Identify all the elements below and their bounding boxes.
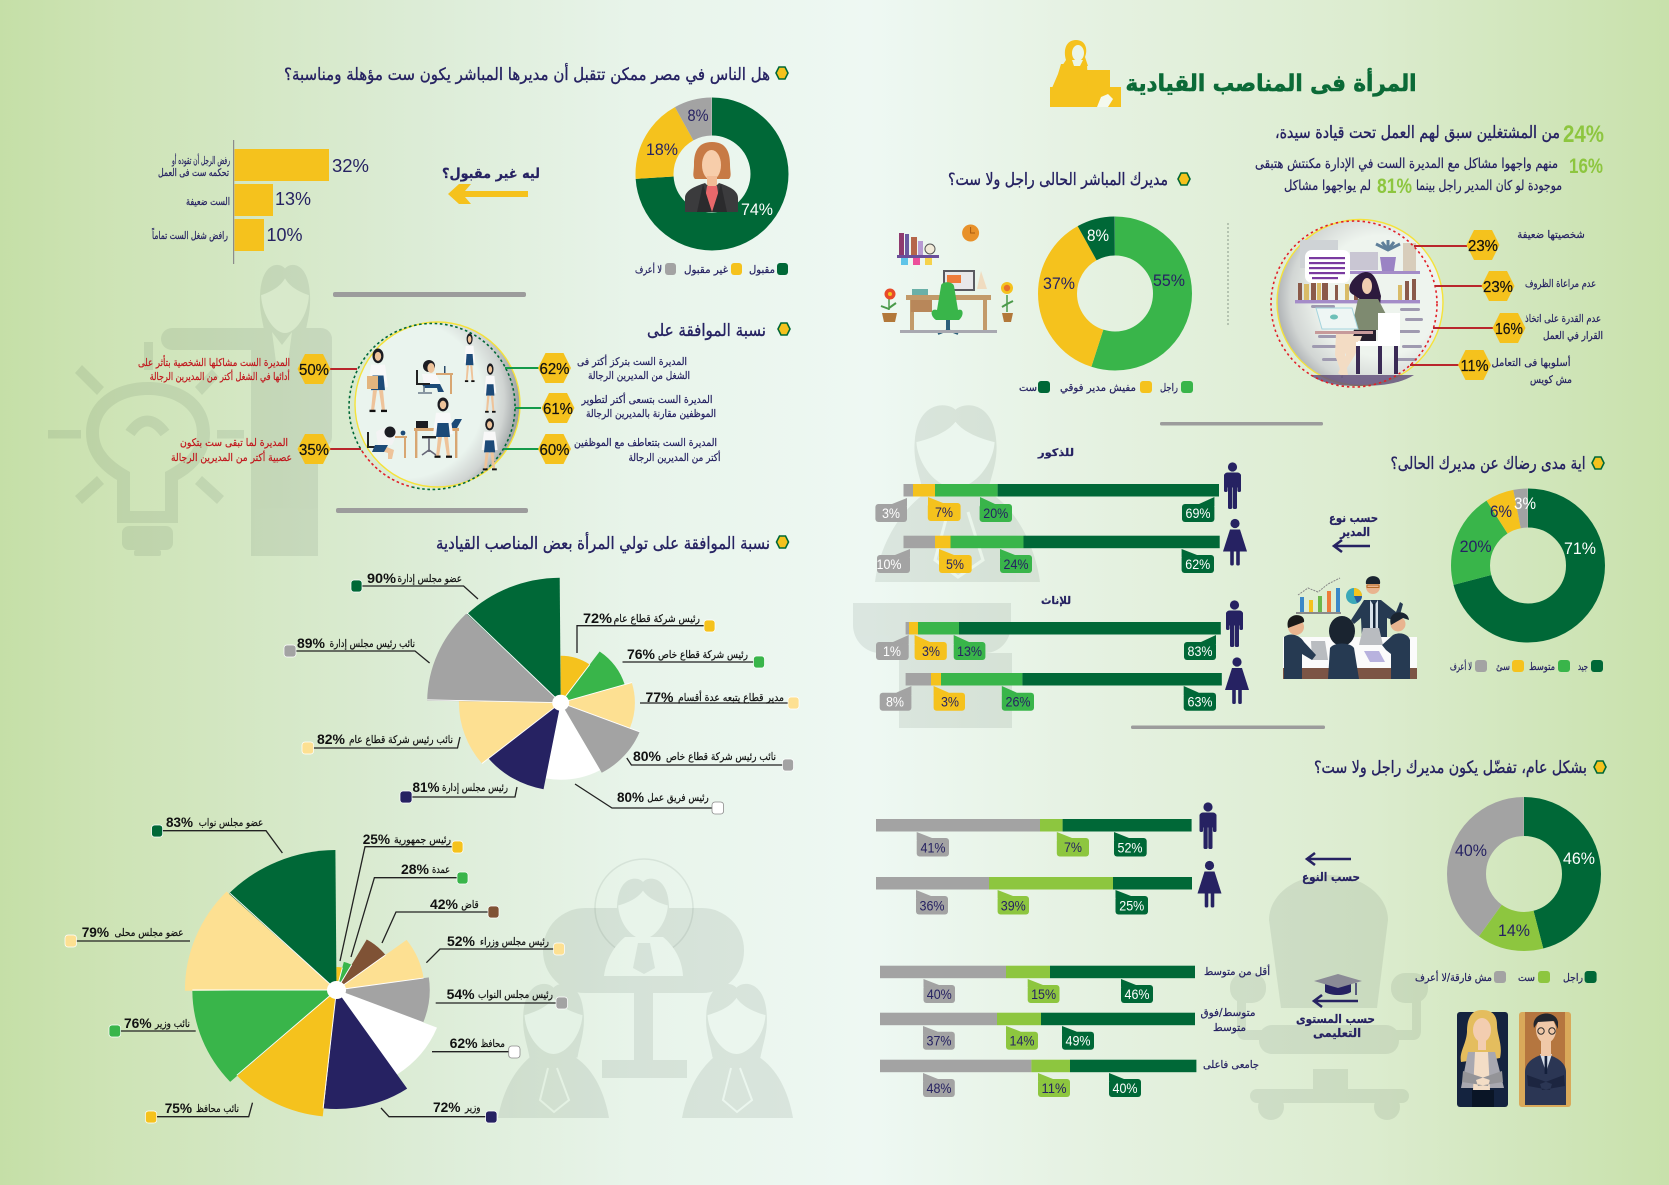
callout: 39 percent xyxy=(998,890,1029,914)
donut chart: satisfaction: 6% xyxy=(1490,502,1512,521)
donut chart: acceptance: 74% xyxy=(741,200,773,219)
label: local council member: عضو مجلس محلى xyxy=(114,927,184,939)
reason: not considering circumstances: 23% xyxy=(1483,279,1513,296)
watermark: podium with three people xyxy=(498,859,793,1118)
label: board deputy xyxy=(284,635,430,663)
callout: 62 percent: 62% xyxy=(1185,556,1210,572)
callout: 3 percent: 3% xyxy=(922,643,940,659)
label: deputy minister xyxy=(109,1015,196,1037)
callout: 37 percent xyxy=(923,1026,955,1050)
callout: 5 percent: 5% xyxy=(946,556,964,572)
label: public company deputy: نائب رئيس شركة قطاع عام xyxy=(349,734,453,746)
callout: 63 percent xyxy=(1184,686,1216,711)
label: sector director xyxy=(640,689,799,709)
legend: satisfaction: سئ xyxy=(1496,661,1510,673)
callout: 7 percent: 7% xyxy=(935,504,953,520)
legend: acceptance xyxy=(635,262,788,276)
bar row: male respondents, male icon xyxy=(875,462,1241,522)
item: 50 percent xyxy=(138,354,357,384)
donut chart: general preference: 40% xyxy=(1455,841,1487,860)
callout: 49 percent xyxy=(1062,1026,1094,1050)
label: team leader xyxy=(575,784,724,814)
donut chart: current manager gender: 8% xyxy=(1087,226,1109,245)
label: private company head: 76% xyxy=(627,646,656,662)
bar chart: reasons for rejection: 32% xyxy=(332,156,369,176)
label: mayor xyxy=(351,861,468,957)
item: 50 percent: 50% xyxy=(299,362,329,379)
illustration: business meeting xyxy=(1283,576,1417,679)
label: public company deputy xyxy=(302,731,460,754)
legend: general preference: ست xyxy=(1518,972,1535,984)
label: board deputy: 89% xyxy=(297,635,326,651)
stat: 16 and 81 percent: لم يواجهوا مشاكل xyxy=(1284,178,1371,194)
callout: 24 percent xyxy=(1000,549,1032,573)
donut chart: satisfaction: 20% xyxy=(1460,537,1492,556)
callout: 26 percent: 26% xyxy=(1006,694,1030,710)
bar row: less than intermediate: أقل من متوسط xyxy=(1204,964,1270,978)
donut chart: acceptance: 18% xyxy=(646,140,678,159)
callout: 36 percent: 36% xyxy=(920,898,944,914)
label: president: 25% xyxy=(363,831,391,847)
donut chart: general preference: 46% xyxy=(1563,849,1595,868)
item: 62 percent xyxy=(505,353,690,383)
item: 61 percent xyxy=(515,392,716,423)
reason: not considering circumstances: عدم مراعاة الظروف xyxy=(1525,278,1596,290)
label: board chair: 81% xyxy=(412,779,440,795)
legend: manager gender: مفيش مدير فوقي xyxy=(1060,382,1136,394)
callout: 62 percent xyxy=(1182,549,1214,573)
label: MP: 83% xyxy=(166,814,194,830)
callout: 46 percent xyxy=(1121,979,1153,1003)
reason: weak personality xyxy=(1414,229,1585,260)
heading: agreement: نسبة الموافقة على xyxy=(647,321,766,341)
label: team leader: رئيس فريق عمل xyxy=(647,792,709,804)
callout: 69 percent xyxy=(1182,497,1214,522)
pie labels: political posts xyxy=(65,814,568,1123)
bar row: intermediate and above: متوسط xyxy=(1213,1022,1246,1034)
legend: satisfaction: جيد xyxy=(1578,661,1588,673)
callout: 26 percent xyxy=(1002,686,1034,711)
divider xyxy=(336,508,528,513)
divider xyxy=(1160,422,1323,426)
donut chart: current manager gender: 37% xyxy=(1043,274,1075,293)
callout: 25 percent xyxy=(1116,890,1148,914)
callout: 11 percent xyxy=(1038,1073,1070,1097)
callout: 36 percent xyxy=(916,890,948,914)
illustration: woman at work in circle xyxy=(1271,220,1443,387)
reason: weak personality: شخصيتها ضعيفة xyxy=(1517,229,1585,241)
bar row: university: جامعى فاعلى xyxy=(1203,1059,1259,1071)
bar row: intermediate and above xyxy=(880,1007,1256,1050)
stat: 16 and 81 percent: 81% xyxy=(1377,175,1412,198)
label: judge: 42% xyxy=(430,896,459,912)
bar row: university xyxy=(880,1059,1259,1097)
sleeping woman at desk xyxy=(368,426,407,459)
label: public company head: رئيس شركة قطاع عام xyxy=(614,613,700,625)
label: prime minister: 52% xyxy=(447,933,476,949)
bar row: less than intermediate xyxy=(880,964,1270,1003)
label: board member: 90% xyxy=(367,570,397,586)
item: 61 percent: 61% xyxy=(543,401,573,418)
bar chart: reasons for rejection: تحكمه ست فى العمل xyxy=(158,167,229,179)
legend: general preference: راجل xyxy=(1563,972,1583,984)
illustration: office women in circle xyxy=(349,322,520,489)
reason: decision making xyxy=(1433,313,1603,343)
bar chart: reasons for rejection: رفض الرجل أن تقوده أو xyxy=(171,153,230,167)
callout: 41 percent: 41% xyxy=(920,840,946,856)
label: team leader: 80% xyxy=(617,789,645,805)
label: private company deputy: 80% xyxy=(633,748,662,764)
legend: general preference xyxy=(1415,970,1597,984)
label: deputy governor xyxy=(145,1100,252,1123)
bar chart: reasons for rejection: الست ضعيفة xyxy=(186,196,230,208)
standing woman at desk xyxy=(414,397,462,458)
donut chart: general preference xyxy=(1455,816,1595,940)
legend: acceptance: لا أعرف xyxy=(635,262,662,276)
legend: satisfaction: لا أعرف xyxy=(1450,659,1472,673)
legend: manager gender: ست xyxy=(1019,382,1037,394)
label: president: رئيس جمهورية xyxy=(394,834,451,846)
label: private company head: رئيس شركة قطاع خاص xyxy=(658,649,748,661)
callout: 15 percent: 15% xyxy=(1031,986,1056,1002)
item: 60 percent: أكتر من المديرين الرجالة xyxy=(628,450,721,464)
callout: 37 percent: 37% xyxy=(926,1033,952,1049)
legend: acceptance: مقبول xyxy=(749,264,775,276)
callout: 52 percent xyxy=(1114,832,1147,856)
reason: decision making: 16% xyxy=(1495,321,1523,338)
callout: 40 percent xyxy=(1109,1073,1141,1097)
label: deputy governor: 75% xyxy=(165,1100,193,1116)
legend: satisfaction: متوسط xyxy=(1529,661,1555,673)
callout: 40 percent xyxy=(924,979,955,1003)
arrow and label: by gender: حسب النوع xyxy=(1302,870,1360,885)
reason: weak personality: 23% xyxy=(1468,238,1498,255)
donut chart: general preference: 14% xyxy=(1498,921,1530,940)
item: 35 percent xyxy=(171,434,361,464)
label: prime minister xyxy=(426,933,564,963)
label: minister: 72% xyxy=(433,1099,461,1115)
callout: 3 percent xyxy=(915,635,947,660)
bar row: male respondents, female icon xyxy=(876,519,1247,573)
callout: 5 percent xyxy=(939,549,972,573)
item: 35 percent: 35% xyxy=(299,442,329,459)
callout: 41 percent xyxy=(917,832,949,856)
callout: 69 percent: 69% xyxy=(1186,505,1210,521)
divider xyxy=(333,292,526,297)
callout: 83 percent xyxy=(1184,635,1216,660)
pie labels: posts xyxy=(284,570,799,814)
label: sector director: مدير قطاع يتبعه عدة أقسام xyxy=(678,690,784,704)
watermark: lightbulb and businesswoman xyxy=(48,265,332,556)
label: deputy minister: نائب وزير xyxy=(154,1018,190,1030)
label: deputy minister: 76% xyxy=(124,1015,152,1031)
seated man at desk xyxy=(417,360,453,394)
callout: 46 percent: 46% xyxy=(1124,986,1150,1002)
callout: 1 percent xyxy=(876,635,909,660)
stat: 24 percent: من المشتغلين سبق لهم العمل تحت قيادة سيدة، xyxy=(1275,123,1560,143)
title block: المرأة فى المناصب القيادية xyxy=(1126,67,1416,97)
label: mayor: 28% xyxy=(401,861,430,877)
item: 35 percent: عصبية أكتر من المديرين الرجالة xyxy=(171,450,292,464)
callout: 11 percent: 11% xyxy=(1042,1080,1066,1096)
callout: 83 percent: 83% xyxy=(1188,643,1212,659)
callout: 10 percent: 10% xyxy=(876,556,902,572)
item: 50 percent: أدائها في الشغل أكتر من المديرين الرجالة xyxy=(150,369,290,383)
label: private company head xyxy=(622,646,764,668)
legend: general preference: مش فارقة/لا أعرف xyxy=(1415,970,1492,984)
arrow: yellow left xyxy=(448,184,528,204)
bar chart: reasons for rejection: 10% xyxy=(266,225,302,245)
label: parliament speaker: رئيس مجلس النواب xyxy=(478,989,553,1001)
label: local council member: 79% xyxy=(82,924,110,940)
stat: 16 and 81 percent xyxy=(1255,155,1603,198)
label: board chair xyxy=(400,779,517,803)
heading: direct manager: مديرك المباشر الحالى راجل ولا ست؟ xyxy=(948,170,1168,190)
label: minister: وزير xyxy=(464,1102,480,1114)
label: public company deputy: 82% xyxy=(317,731,346,747)
item: 60 percent xyxy=(504,434,721,464)
label: females: للإناث xyxy=(1041,595,1071,607)
callout: 7 percent: 7% xyxy=(1064,839,1082,855)
polar pie chart: political posts xyxy=(192,893,424,1108)
legend: satisfaction xyxy=(1450,659,1603,673)
callout: 15 percent xyxy=(1028,979,1060,1003)
callout: 7 percent xyxy=(1057,832,1089,856)
legend: acceptance: غير مقبول xyxy=(684,264,728,276)
callout: 14 percent xyxy=(1006,1026,1038,1050)
label: why not accepted: ليه غير مقبول؟ xyxy=(442,166,540,182)
item: 60 percent: المديرة الست بتتعاطف مع الموظفين xyxy=(574,437,717,449)
label: judge xyxy=(382,896,499,943)
callout: 40 percent: 40% xyxy=(1112,1080,1138,1096)
watermark: office chair xyxy=(1230,875,1428,1120)
item: 60 percent: 60% xyxy=(540,442,570,459)
item: 62 percent: 62% xyxy=(540,361,570,378)
donut chart: acceptance: 8% xyxy=(688,106,708,125)
bar row: general, female icon xyxy=(876,861,1222,914)
callout: 52 percent: 52% xyxy=(1118,840,1142,856)
callout: 48 percent: 48% xyxy=(926,1080,952,1096)
label: MP: عضو مجلس نواب xyxy=(199,817,263,829)
label: governor: 62% xyxy=(450,1035,478,1051)
label: deputy governor: نائب محافظ xyxy=(196,1103,239,1115)
callout: 24 percent: 24% xyxy=(1004,556,1028,572)
stat: 16 and 81 percent: موجودة لو كان المدير راجل بينما xyxy=(1416,178,1562,194)
label: public company head: 72% xyxy=(583,610,613,626)
callout: 3 percent: 3% xyxy=(941,694,959,710)
label: board chair: رئيس مجلس إدارة xyxy=(442,782,508,794)
item: 62 percent: المديرة الست بتركز أكتر فى xyxy=(577,354,687,368)
callout: 48 percent xyxy=(923,1073,955,1097)
label: private company deputy xyxy=(627,748,794,771)
reason: bad style: مش كويس xyxy=(1530,374,1572,386)
label: sector director: 77% xyxy=(646,689,674,705)
reason: bad style xyxy=(1410,350,1572,386)
heading: agreement on leadership posts: نسبة الموافقة على تولي المرأة بعض المناصب القيادية xyxy=(436,532,770,554)
item: 35 percent: المديرة لما تبقى ست بتكون xyxy=(180,437,288,449)
bar row: intermediate and above: متوسط/فوق xyxy=(1200,1007,1256,1019)
item: 62 percent: الشغل من المديرين الرجالة xyxy=(588,370,690,382)
callout: 25 percent: 25% xyxy=(1119,898,1144,914)
reason: not considering circumstances xyxy=(1435,271,1596,301)
reason: decision making: عدم القدرة على اتخاذ xyxy=(1525,313,1601,325)
arrow: left navy xyxy=(1334,540,1370,552)
reason: bad style: أسلوبها فى التعامل xyxy=(1492,355,1571,369)
label: governor: محافظ xyxy=(480,1038,505,1050)
donut chart: satisfaction: 71% xyxy=(1564,539,1596,558)
callout: 40 percent: 40% xyxy=(927,986,952,1002)
callout: 8 percent: 8% xyxy=(886,694,904,710)
callout: 20 percent xyxy=(980,497,1012,522)
label: private company deputy: نائب رئيس شركة قطاع خاص xyxy=(666,751,776,763)
donut chart: acceptance xyxy=(646,106,773,232)
icon: graduation cap with arrow xyxy=(1314,974,1362,1007)
donut chart: current manager gender xyxy=(1043,226,1185,351)
label: males: للذكور xyxy=(1037,447,1074,459)
callout: 3 percent: 3% xyxy=(882,505,900,521)
callout: 14 percent: 14% xyxy=(1010,1033,1034,1049)
label: minister xyxy=(381,1099,497,1123)
callout: 63 percent: 63% xyxy=(1188,694,1212,710)
polar pie chart: private and public sector posts xyxy=(427,613,640,766)
label: MP xyxy=(152,814,282,853)
legend: manager gender: راجل xyxy=(1160,382,1178,394)
illustration: woman avatar xyxy=(685,142,738,212)
label: prime minister: رئيس مجلس وزراء xyxy=(480,936,549,948)
label: by manager gender xyxy=(1329,511,1378,539)
label: board member: عضو مجلس إدارة xyxy=(397,573,462,585)
heading: acceptance question: هل الناس في مصر ممكن تتقبل أن مديرها المباشر يكون ست مؤهلة ومناسبة؟ xyxy=(284,63,770,85)
donut chart: current manager gender: 55% xyxy=(1153,271,1185,290)
callout: 39 percent: 39% xyxy=(1001,898,1026,914)
title block xyxy=(1050,40,1416,107)
dotted divider xyxy=(1227,223,1229,327)
label: parliament speaker: 54% xyxy=(447,986,475,1002)
agreement items: right side xyxy=(504,353,721,464)
label: by manager gender: المدير xyxy=(1339,525,1370,539)
stat: 16 and 81 percent: منهم واجهوا مشاكل مع المديرة الست في الإدارة مكنتش هتبقى xyxy=(1255,156,1558,172)
illustration: woman portrait xyxy=(1457,1010,1508,1107)
label: board member xyxy=(351,570,478,599)
illustration: desk and plants xyxy=(881,224,1013,334)
callout: 1 percent: 1% xyxy=(883,643,901,659)
callout: 3 percent xyxy=(875,498,907,522)
bar row: general, male icon xyxy=(876,802,1216,856)
arrow and label: by gender xyxy=(1302,853,1360,885)
callout: 8 percent xyxy=(880,686,911,711)
item: 50 percent: المديرة الست مشاكلها الشخصية بتأثر على xyxy=(138,355,290,369)
label: by education level: التعليمى xyxy=(1313,1026,1361,1040)
reasons for problems with female managers xyxy=(1410,229,1603,386)
callout: 13 percent xyxy=(954,635,985,660)
agreement items: left side xyxy=(138,354,361,464)
stat: 16 and 81 percent: 16% xyxy=(1569,155,1603,178)
label: local council member xyxy=(65,924,190,947)
stat: 24 percent: 24% xyxy=(1563,121,1604,148)
callout: 20 percent: 20% xyxy=(983,505,1008,521)
icon: woman at desk xyxy=(1050,40,1121,107)
heading: general preference: بشكل عام، تفضّل يكون مديرك راجل ولا ست؟ xyxy=(1314,758,1587,778)
divider xyxy=(1131,726,1325,729)
label: by education level: حسب المستوى xyxy=(1296,1012,1375,1027)
item: 61 percent: الموظفين مقارنة بالمديرين الرجالة xyxy=(586,408,716,420)
callout: 10 percent xyxy=(876,549,910,573)
callout: 49 percent: 49% xyxy=(1066,1033,1090,1049)
bar row: female respondents, male icon xyxy=(876,600,1243,660)
callout: 13 percent: 13% xyxy=(957,643,982,659)
label: board deputy: نائب رئيس مجلس إدارة xyxy=(330,638,415,650)
label: by education level xyxy=(1296,1012,1375,1040)
item: 61 percent: المديرة الست بتسعى أكتر لتطوير xyxy=(581,392,712,406)
heading: satisfaction: اية مدى رضاك عن مديرك الحالى؟ xyxy=(1390,454,1586,474)
callout: 3 percent xyxy=(934,686,965,711)
label: mayor: عمدة xyxy=(432,864,450,876)
watermark: woman and podium xyxy=(853,405,1040,728)
bar chart: reasons for rejection xyxy=(152,140,369,264)
bar chart: reasons for rejection: 13% xyxy=(275,189,311,209)
donut chart: satisfaction: 3% xyxy=(1514,494,1536,513)
bar chart: reasons for rejection: رافض شغل الست تماماً xyxy=(152,228,228,242)
callout: 7 percent xyxy=(928,497,961,521)
bar row: female respondents, female icon xyxy=(880,657,1249,711)
illustration: man portrait xyxy=(1519,1012,1571,1107)
donut chart: satisfaction xyxy=(1460,494,1596,623)
label: judge: قاض xyxy=(461,899,479,911)
label: governor xyxy=(432,1035,520,1058)
legend: manager gender xyxy=(1019,381,1193,394)
label: public company head xyxy=(577,610,715,653)
label: president xyxy=(340,831,463,961)
reason: bad style: 11% xyxy=(1460,358,1488,375)
label: parliament speaker xyxy=(436,986,568,1009)
reason: decision making: القرار في العمل xyxy=(1543,330,1603,342)
label: by manager gender: حسب نوع xyxy=(1329,511,1378,526)
